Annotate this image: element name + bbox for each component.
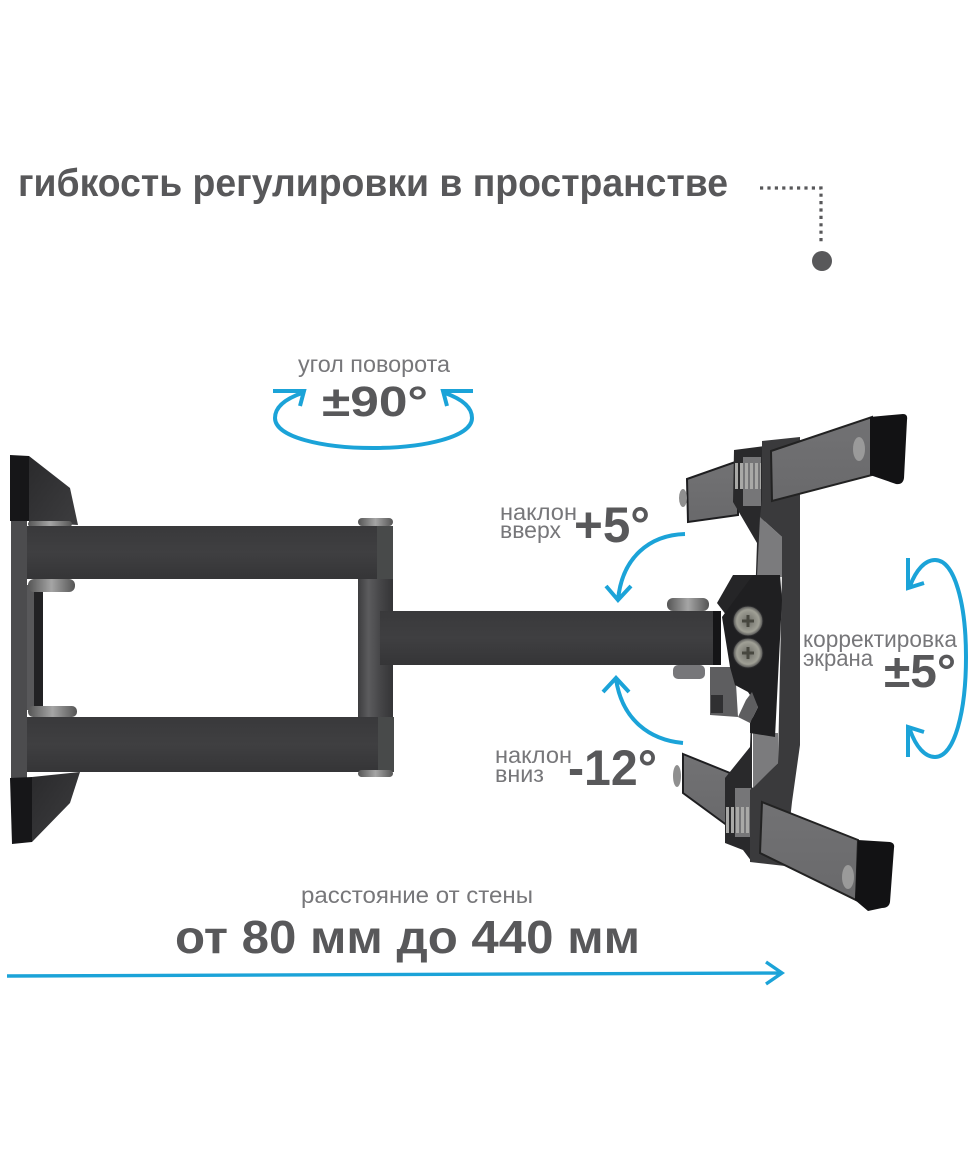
arm pivot nuts — [667, 598, 709, 679]
vertical elbow tube — [358, 578, 393, 717]
tilt up callout — [500, 497, 685, 600]
upper arm — [27, 518, 393, 579]
adjustment screws — [733, 606, 763, 668]
dotted leader line with end dot — [760, 188, 832, 271]
label: screen correction: корректировка — [803, 626, 957, 652]
tilt bracket plate — [722, 575, 782, 737]
label: screen correction: экрана — [803, 645, 873, 671]
rear dark plate — [725, 446, 765, 862]
value: plus-minus 90 degrees: ±90° — [322, 378, 428, 426]
value: minus 12 degrees: -12° — [568, 740, 657, 796]
label: tilt down: наклон — [495, 742, 572, 768]
label: distance from wall: расстояние от стены — [301, 882, 533, 908]
value: plus-minus 5 degrees: ±5° — [884, 645, 956, 697]
label: tilt down: вниз — [495, 761, 544, 787]
wall mount bracket and double arm — [10, 455, 720, 844]
gray inner panels — [753, 517, 782, 788]
label: tilt up — [500, 499, 577, 543]
wall plate — [10, 455, 80, 844]
lower front crossbar — [760, 802, 858, 900]
arrow: tilt up — [606, 534, 685, 600]
value: plus 5 degrees: +5° — [574, 497, 650, 553]
distance from wall callout — [7, 882, 782, 984]
label: rotation angle: угол поворота — [298, 351, 450, 377]
upper front crossbar — [771, 417, 872, 501]
upper end cap — [870, 414, 907, 484]
screen correction callout — [803, 558, 966, 757]
label: tilt up: вверх — [500, 517, 561, 543]
rear crossbars — [673, 461, 738, 826]
upper bar screw — [853, 437, 865, 461]
front plate — [750, 437, 800, 866]
arrow: tilt down — [603, 678, 683, 743]
value: 80 to 440 mm: от 80 мм до 440 мм — [175, 911, 640, 963]
middle arm — [380, 611, 720, 665]
label: tilt down — [495, 742, 572, 787]
lower bar screw — [842, 865, 854, 889]
lower end cap — [855, 840, 894, 911]
spring bolts — [726, 457, 761, 837]
TV mounting bracket — [667, 414, 907, 911]
tilt down callout — [495, 678, 683, 796]
hinge pins on wall plate — [28, 521, 77, 717]
label: tilt up: наклон — [500, 499, 577, 525]
arrow: rotation ellipse — [273, 391, 473, 448]
rotation angle callout — [273, 351, 473, 448]
tilt hinge body — [710, 575, 760, 717]
label: screen correction — [803, 626, 957, 671]
arrow: screen rotation — [908, 558, 966, 757]
arrow: distance — [7, 962, 782, 984]
lower arm — [27, 717, 394, 777]
title: гибкость регулировки в пространстве — [18, 162, 728, 205]
